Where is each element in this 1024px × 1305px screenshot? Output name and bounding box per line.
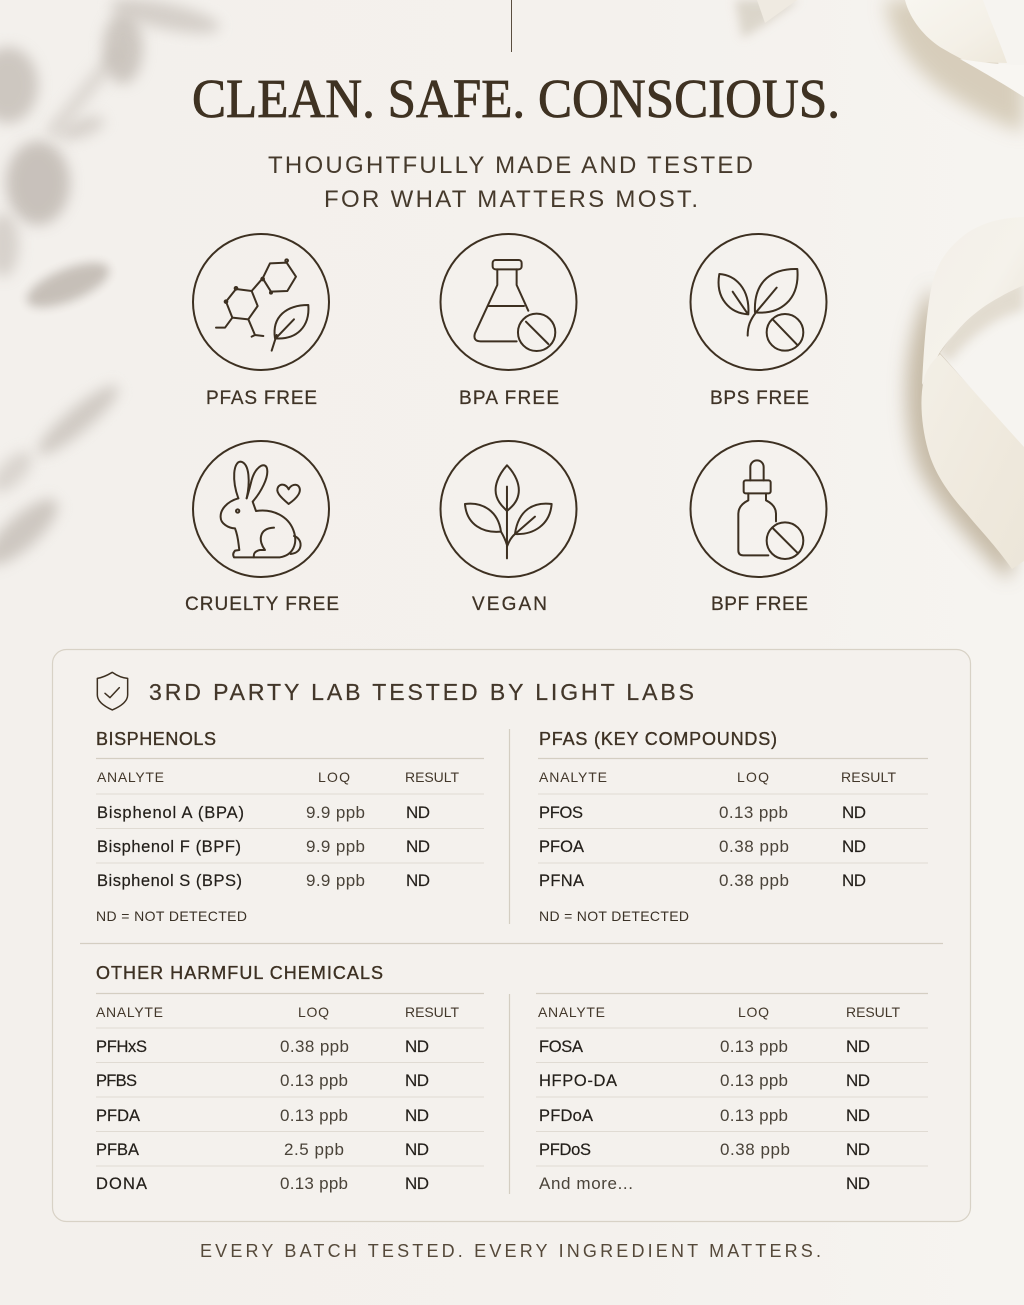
subtitle: FOR WHAT MATTERS MOST. <box>324 186 698 213</box>
table: other harmful chemicals right: ANALYTE <box>538 1004 605 1020</box>
ribbon: top right <box>735 0 1024 132</box>
ribbon: right loop <box>906 217 1024 580</box>
icon: molecule and leaf <box>216 259 308 351</box>
table: other harmful chemicals right <box>536 994 928 1193</box>
icon: rabbit with heart <box>221 462 301 557</box>
table: bisphenols: 9.9 ppb <box>306 803 365 822</box>
icon: dropper bottle with pill <box>738 460 803 559</box>
table: other harmful chemicals left: 0.13 ppb <box>280 1106 348 1125</box>
label: VEGAN <box>472 594 547 615</box>
table: other harmful chemicals left: RESULT <box>405 1004 459 1020</box>
table: other harmful chemicals left <box>96 963 484 1193</box>
table: other harmful chemicals right: LOQ <box>738 1004 769 1020</box>
label: BPA FREE <box>459 388 559 409</box>
table: other harmful chemicals right: PFDoA <box>539 1107 593 1125</box>
table: PFAS key compounds: 0.38 ppb <box>719 837 789 856</box>
table: bisphenols: Bisphenol A (BPA) <box>97 804 244 822</box>
table: PFAS key compounds: ND <box>842 803 866 822</box>
table: PFAS key compounds: ANALYTE <box>539 769 607 785</box>
table: PFAS key compounds: PFOS <box>539 804 583 822</box>
subtitle <box>268 152 753 213</box>
table: other harmful chemicals right: PFDoS <box>539 1141 591 1159</box>
table: other harmful chemicals left: ND <box>405 1071 429 1090</box>
table: other harmful chemicals left: ND <box>405 1037 429 1056</box>
table: other harmful chemicals left: ND <box>405 1174 429 1193</box>
table: other harmful chemicals left: DONA <box>96 1175 147 1193</box>
table: other harmful chemicals left: 0.13 ppb <box>280 1174 348 1193</box>
badge: BPS free <box>690 234 826 409</box>
table: bisphenols: RESULT <box>405 769 459 785</box>
badge: vegan <box>440 441 576 615</box>
table: other harmful chemicals right: HFPO-DA <box>539 1072 617 1090</box>
table: bisphenols: ND <box>406 871 430 890</box>
table: PFAS key compounds: PFNA <box>539 872 584 890</box>
table: other harmful chemicals left: PFBS <box>96 1072 137 1090</box>
badge: cruelty free <box>185 441 339 615</box>
table: other harmful chemicals right: FOSA <box>539 1038 583 1056</box>
table: other harmful chemicals left: PFDA <box>96 1107 140 1125</box>
table: PFAS key compounds: ND <box>842 871 866 890</box>
top vertical line <box>510 0 512 52</box>
icon: sprout <box>465 465 552 558</box>
table: PFAS key compounds: ND = NOT DETECTED <box>539 908 689 924</box>
table: bisphenols <box>96 729 484 924</box>
table: PFAS key compounds: 0.13 ppb <box>719 803 788 822</box>
table: bisphenols: ND <box>406 803 430 822</box>
table: other harmful chemicals right: ND <box>846 1140 870 1159</box>
label: CRUELTY FREE <box>185 594 339 615</box>
table: bisphenols: ND = NOT DETECTED <box>96 908 247 924</box>
table: PFAS key compounds: PFOA <box>539 838 584 856</box>
leaf shadows decoration <box>0 0 222 575</box>
table: other harmful chemicals left: ND <box>405 1106 429 1125</box>
table: PFAS key compounds: ND <box>842 837 866 856</box>
table: other harmful chemicals left: 0.13 ppb <box>280 1071 348 1090</box>
table: other harmful chemicals left: PFBA <box>96 1141 139 1159</box>
table: bisphenols: Bisphenol S (BPS) <box>97 872 242 890</box>
label: BPF FREE <box>711 594 808 615</box>
table: other harmful chemicals right: ND <box>846 1106 870 1125</box>
table: other harmful chemicals left: PFHxS <box>96 1038 147 1056</box>
table: bisphenols: ND <box>406 837 430 856</box>
table: other harmful chemicals right: ND <box>846 1037 870 1056</box>
table: other harmful chemicals right: 0.13 ppb <box>720 1106 788 1125</box>
table: other harmful chemicals right: 0.13 ppb <box>720 1071 788 1090</box>
table: PFAS key compounds: LOQ <box>737 769 769 785</box>
table: other harmful chemicals left: OTHER HARMFUL CHEMICALS <box>96 963 383 983</box>
table: bisphenols: LOQ <box>318 769 350 785</box>
table: PFAS key compounds: PFAS (KEY COMPOUNDS) <box>539 729 777 749</box>
table: other harmful chemicals right: And more... <box>539 1174 633 1193</box>
table: other harmful chemicals right: ND <box>846 1174 870 1193</box>
table: bisphenols: 9.9 ppb <box>306 837 365 856</box>
table: other harmful chemicals right: 0.38 ppb <box>720 1140 790 1159</box>
icon: leaves with pill <box>719 269 803 351</box>
table: PFAS key compounds: 0.38 ppb <box>719 871 789 890</box>
table: other harmful chemicals right: 0.13 ppb <box>720 1037 788 1056</box>
table: PFAS key compounds: RESULT <box>841 769 896 785</box>
table: bisphenols: BISPHENOLS <box>96 729 216 749</box>
table: bisphenols: 9.9 ppb <box>306 871 365 890</box>
table: other harmful chemicals left: LOQ <box>298 1004 329 1020</box>
badge: BPA free <box>440 234 576 409</box>
panel heading: 3RD PARTY LAB TESTED BY LIGHT LABS <box>149 679 694 705</box>
badge: BPF free <box>690 441 826 615</box>
table: other harmful chemicals left: 2.5 ppb <box>284 1140 344 1159</box>
icon: shield with check <box>97 672 128 710</box>
label: BPS FREE <box>710 388 809 409</box>
icon: flask with pill <box>474 260 555 351</box>
badge: PFAS free <box>193 234 329 409</box>
table: other harmful chemicals right: ND <box>846 1071 870 1090</box>
table: other harmful chemicals left: 0.38 ppb <box>280 1037 349 1056</box>
label: PFAS FREE <box>206 388 317 409</box>
table: other harmful chemicals right: RESULT <box>846 1004 900 1020</box>
footer tagline: EVERY BATCH TESTED. EVERY INGREDIENT MATTERS. <box>200 1241 821 1261</box>
table: bisphenols: ANALYTE <box>97 769 164 785</box>
table: PFAS key compounds <box>538 729 928 924</box>
title: CLEAN. SAFE. CONSCIOUS. <box>192 68 840 129</box>
panel: lab results <box>52 650 970 1222</box>
table: bisphenols: Bisphenol F (BPF) <box>97 838 241 856</box>
table: other harmful chemicals left: ND <box>405 1140 429 1159</box>
subtitle: THOUGHTFULLY MADE AND TESTED <box>268 152 753 179</box>
table: other harmful chemicals left: ANALYTE <box>96 1004 163 1020</box>
